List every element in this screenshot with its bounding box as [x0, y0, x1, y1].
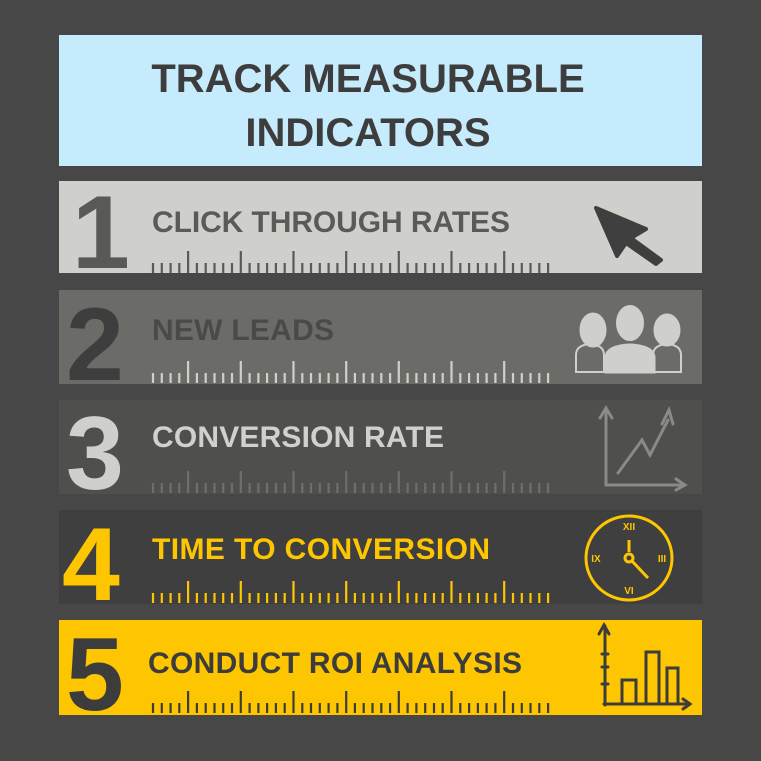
- number 3: 3: [66, 396, 124, 512]
- icon: clock: III: [658, 554, 666, 565]
- label: TIME TO CONVERSION: [152, 533, 490, 566]
- title banner: TRACK MEASURABLE: [151, 57, 585, 101]
- number 4: 4: [62, 507, 120, 623]
- label: CLICK THROUGH RATES: [152, 206, 510, 239]
- icon: clock: IX: [591, 554, 601, 565]
- panel 1: click through rates: [59, 175, 702, 291]
- icon: cursor: [596, 208, 661, 264]
- ruler: [153, 691, 548, 713]
- ruler: [153, 471, 548, 493]
- icon: people: [576, 304, 681, 373]
- panel 5: conduct roi analysis: [59, 617, 702, 733]
- number 2: 2: [66, 287, 124, 403]
- icon: clock: VI: [624, 586, 634, 597]
- ruler: [153, 361, 548, 383]
- panel 2: new leads: [59, 287, 702, 403]
- number 1: 1: [72, 175, 130, 291]
- ruler: [153, 251, 548, 273]
- title banner: INDICATORS: [245, 111, 491, 155]
- panel 4: time to conversion: [59, 507, 702, 623]
- label: CONDUCT ROI ANALYSIS: [148, 647, 522, 680]
- icon: clock: XII: [623, 522, 635, 533]
- label: NEW LEADS: [152, 314, 334, 347]
- ruler: [153, 581, 548, 603]
- number 5: 5: [66, 617, 124, 733]
- icon: line chart: [600, 408, 685, 490]
- panel 3: conversion rate: [59, 396, 702, 512]
- icon: bar chart: [599, 625, 690, 709]
- icon: clock: [586, 516, 672, 600]
- title banner: [59, 35, 702, 166]
- label: CONVERSION RATE: [152, 421, 444, 454]
